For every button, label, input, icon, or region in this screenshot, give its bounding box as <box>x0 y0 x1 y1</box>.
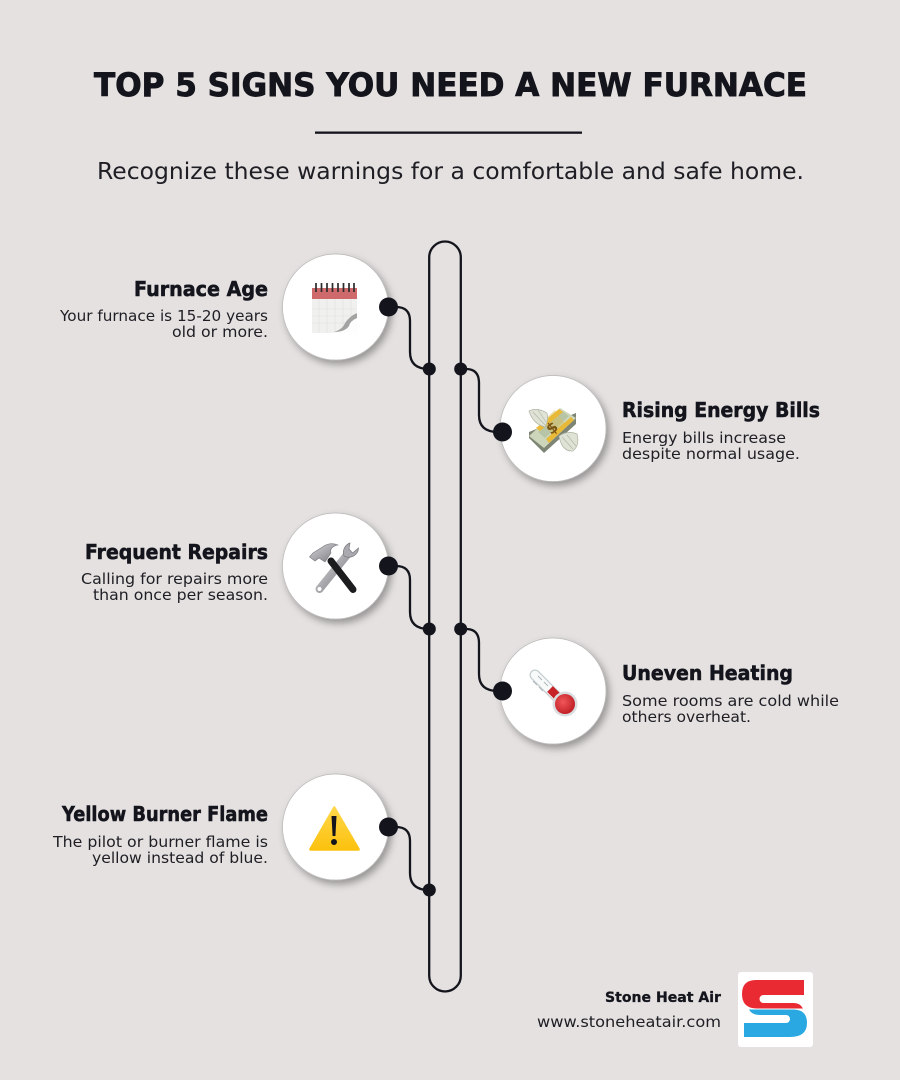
text: Rising Energy Bills description: Energy bills increase <box>622 429 786 447</box>
text: Furnace Age description: Your furnace is 15-20 years <box>59 307 268 325</box>
text: Frequent Repairs description <box>81 570 268 604</box>
logo <box>738 972 813 1047</box>
connector <box>454 622 512 700</box>
connector <box>379 298 436 376</box>
text: Frequent Repairs description: than once per season. <box>93 586 268 604</box>
heading: Rising Energy Bills: Rising Energy Bills <box>622 398 820 422</box>
heading: Yellow Burner Flame: Yellow Burner Flame <box>61 802 268 826</box>
text: Rising Energy Bills description <box>622 429 800 463</box>
heading: Uneven Heating: Uneven Heating <box>622 661 793 685</box>
subtitle: Recognize these warnings for a comfortable and safe home. <box>97 159 804 185</box>
text: Furnace Age description: old or more. <box>172 323 268 341</box>
icon: money with wings: $ <box>542 418 562 438</box>
text: Rising Energy Bills description: despite normal usage. <box>622 445 800 463</box>
central loop line <box>429 242 461 992</box>
icon: thermometer <box>500 638 606 744</box>
text: Yellow Burner Flame description <box>52 833 268 867</box>
title: TOP 5 SIGNS YOU NEED A NEW FURNACE <box>94 66 807 104</box>
item: Frequent Repairs <box>81 513 436 636</box>
text: Furnace Age description <box>59 307 268 341</box>
text: Uneven Heating description: others overheat. <box>622 708 751 726</box>
item: Yellow Burner Flame <box>52 774 436 896</box>
text: Uneven Heating description: Some rooms are cold while <box>622 692 839 710</box>
footer brand text: Stone Heat Air <box>605 990 722 1006</box>
text: Uneven Heating description <box>622 692 839 726</box>
item: Furnace Age <box>59 254 436 376</box>
text: Yellow Burner Flame description: The pilot or burner flame is <box>52 833 268 851</box>
footer brand text: www.stoneheatair.com <box>537 1013 721 1031</box>
item: Uneven Heating <box>454 622 839 744</box>
icon: calendar <box>282 254 388 360</box>
connector <box>454 362 512 442</box>
text: Frequent Repairs description: Calling for repairs more <box>81 570 268 588</box>
icon: money with wings <box>500 376 606 482</box>
text: Yellow Burner Flame description: yellow instead of blue. <box>92 849 268 867</box>
connector <box>379 818 436 896</box>
item: Rising Energy Bills <box>454 362 820 482</box>
heading: Frequent Repairs: Frequent Repairs <box>85 540 268 564</box>
heading: Furnace Age: Furnace Age <box>134 277 268 301</box>
icon: hammer and wrench <box>282 513 388 619</box>
connector <box>379 556 436 636</box>
footer brand text <box>537 990 722 1031</box>
icon: warning triangle <box>282 774 388 880</box>
